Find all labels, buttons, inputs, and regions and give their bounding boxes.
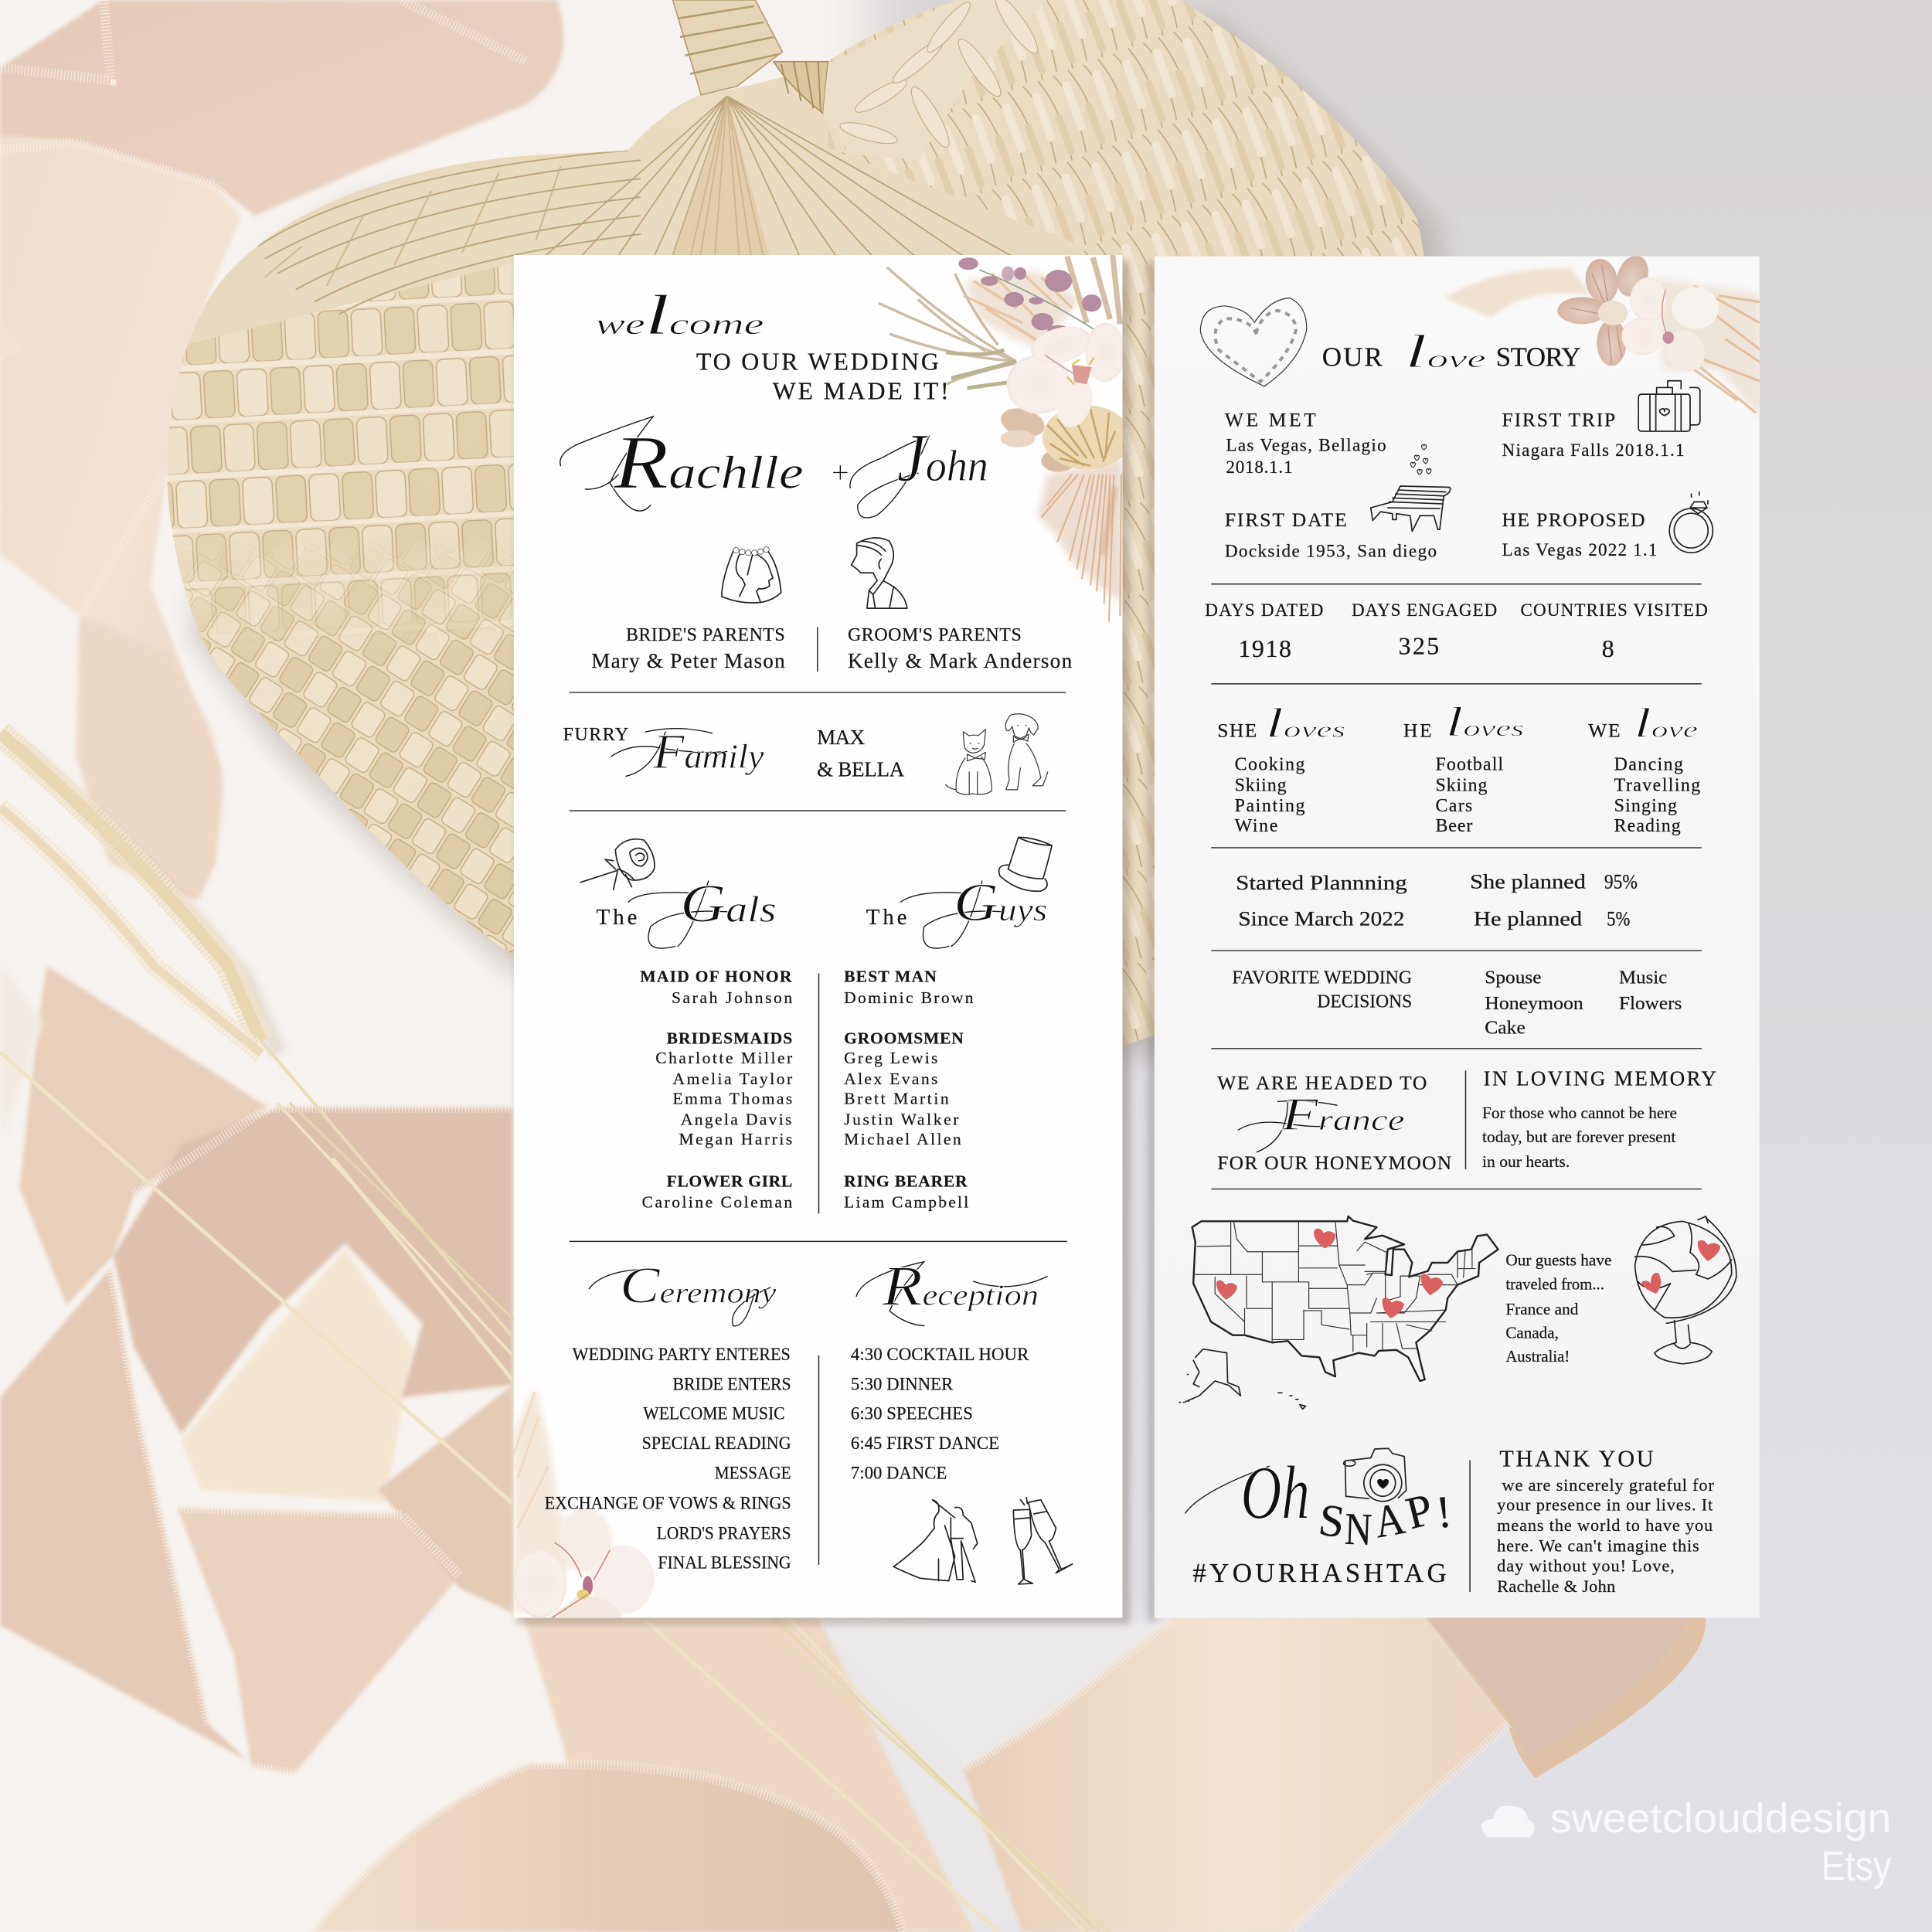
block: favorite wedding decisions: Cake — [1485, 1018, 1526, 1039]
heading: oh snap: S — [1316, 1494, 1348, 1547]
block: parents: GROOM'S PARENTS — [848, 625, 1022, 645]
heading: the gals: The — [597, 905, 637, 930]
block: we love: Singing — [1614, 796, 1677, 816]
block: we love: Travelling — [1614, 776, 1700, 796]
list: ceremony order: MESSAGE — [715, 1462, 791, 1482]
icon: groom — [852, 538, 907, 608]
block: thank you: means the world to have you — [1497, 1515, 1713, 1535]
heading: the guys — [866, 872, 1047, 948]
text: guests travelled: France and — [1505, 1300, 1579, 1318]
block: he proposed: Las Vegas 2022 1.1 — [1502, 539, 1657, 560]
block: planning: 95% — [1604, 871, 1638, 893]
list: groom party: Brett Martin — [844, 1090, 949, 1108]
block: planning: Started Plannning — [1236, 872, 1407, 894]
heading: welcome: TO OUR WEDDING — [696, 348, 939, 375]
floral: top right corner — [879, 255, 1131, 622]
icon: globe — [1635, 1216, 1736, 1364]
icon: champagne flutes — [1013, 1498, 1073, 1584]
block: we love: Reading — [1614, 816, 1681, 836]
list: bridal party: Angela Davis — [681, 1111, 791, 1129]
list: ceremony order: BRIDE ENTERS — [673, 1373, 791, 1393]
block: favorite wedding decisions — [1232, 967, 1682, 1039]
block: he loves: HE — [1403, 719, 1432, 741]
block: we love — [1588, 699, 1700, 836]
heading: the gals: G als — [680, 874, 776, 934]
block: we met: 2018.1.1 — [1226, 457, 1293, 477]
text: hashtag: #YOURHASHTAG — [1192, 1558, 1447, 1588]
block: planning: She planned — [1470, 871, 1586, 893]
stats: counts: DAYS DATED — [1205, 600, 1323, 620]
list: reception schedule: 4:30 COCKTAIL HOUR — [851, 1344, 1029, 1364]
block: he proposed: HE PROPOSED — [1502, 509, 1645, 531]
list: groom party: Liam Campbell — [844, 1192, 968, 1211]
icon: suitcase — [1638, 381, 1700, 431]
block: thank you: your presence in our lives. It — [1497, 1495, 1713, 1515]
block: he loves: Beer — [1435, 816, 1472, 836]
list: bridal party: FLOWER GIRL — [667, 1172, 792, 1190]
block: thank you: THANK YOU — [1499, 1445, 1654, 1471]
icon: ring — [1669, 492, 1713, 553]
floral: bottom left corner — [512, 1386, 655, 1617]
block: in loving memory — [1482, 1067, 1716, 1171]
text: guests travelled: Our guests have — [1505, 1250, 1611, 1269]
block: favorite wedding decisions: FAVORITE WEDDING — [1232, 967, 1412, 988]
block: parents: Kelly & Mark Anderson — [848, 649, 1073, 672]
watermark: Etsy — [1821, 1843, 1891, 1889]
list: reception schedule: 6:45 FIRST DANCE — [851, 1433, 999, 1453]
block: favorite wedding decisions: Music — [1619, 967, 1667, 988]
block: she loves: Painting — [1235, 796, 1305, 816]
chart: USA map with hearts — [1179, 1216, 1498, 1409]
heading: reception: R eception — [881, 1254, 1039, 1317]
icon: leaf heart — [1200, 298, 1307, 386]
list: groom party: Dominic Brown — [844, 988, 974, 1007]
block: thank you — [1497, 1445, 1714, 1596]
icon: small hearts — [1410, 444, 1431, 474]
heading: oh snap: ! — [1434, 1485, 1454, 1538]
icon: bride — [722, 547, 781, 603]
block: planning: He planned — [1474, 907, 1582, 930]
heading: couple names: R achlle — [613, 420, 804, 505]
list: bridal party: Megan Harris — [679, 1130, 792, 1148]
ribbon: upper left satin — [0, 0, 563, 900]
list: groom party: Greg Lewis — [844, 1049, 937, 1067]
heading: oh snap — [1185, 1451, 1454, 1555]
list: bridal party: Emma Thomas — [673, 1090, 792, 1108]
heading: our love story: l ove — [1405, 326, 1486, 378]
block: honeymoon — [1217, 1071, 1451, 1174]
block: furry family: FURRY — [563, 725, 628, 745]
ribbons: below the cards and spool — [311, 1617, 1706, 1932]
heading: ceremony — [589, 1257, 776, 1326]
block: he loves — [1403, 699, 1524, 836]
floral: top right corner — [1444, 251, 1762, 419]
block: he proposed — [1502, 509, 1657, 560]
list: bridal party: Amelia Taylor — [673, 1070, 792, 1088]
block: favorite wedding decisions: Spouse — [1485, 967, 1542, 988]
block: planning: Since March 2022 — [1238, 907, 1405, 930]
heading: oh snap: P — [1401, 1483, 1438, 1539]
heading: the guys: The — [866, 905, 906, 930]
watermark — [1481, 1795, 1891, 1889]
block: furry family — [563, 723, 905, 781]
block: thank you: we are sincerely grateful for — [1502, 1475, 1714, 1495]
heading: couple names: + — [829, 454, 851, 490]
text: guests travelled: Canada, — [1505, 1324, 1559, 1342]
heading: our love story: OUR — [1322, 342, 1383, 372]
block: planning: 5% — [1607, 907, 1630, 930]
block: we love: WE — [1588, 719, 1621, 741]
icon: dancing couple — [893, 1500, 978, 1582]
block: she loves: Skiing — [1235, 776, 1287, 796]
block: we love: Dancing — [1614, 754, 1683, 774]
heading: our love story: STORY — [1496, 342, 1581, 372]
fan shadow — [191, 19, 1460, 1060]
block: he loves: Cars — [1435, 796, 1472, 816]
block: he loves: Skiing — [1435, 776, 1487, 796]
list: ceremony order: LORD'S PRAYERS — [657, 1522, 791, 1543]
text: guests travelled: traveled from... — [1505, 1275, 1604, 1294]
list: ceremony order: WEDDING PARTY ENTERES — [573, 1344, 791, 1364]
icon: cat and dog — [945, 714, 1048, 794]
block: in loving memory: today, but are forever present — [1482, 1128, 1675, 1146]
heading: welcome — [595, 284, 949, 405]
block: favorite wedding decisions: Flowers — [1619, 993, 1682, 1014]
list: groom party: BEST MAN — [844, 968, 937, 986]
heading: reception — [856, 1254, 1047, 1326]
watermark: sweetclouddesign — [1550, 1795, 1891, 1842]
block: she loves — [1217, 699, 1345, 836]
woven palm fan — [167, 0, 1424, 1046]
block: honeymoon: FOR OUR HONEYMOON — [1217, 1151, 1451, 1174]
list: bridal party: BRIDESMAIDS — [667, 1029, 792, 1047]
block: first date: FIRST DATE — [1225, 509, 1347, 531]
heading: oh snap: N — [1344, 1503, 1372, 1555]
block: in loving memory: For those who cannot be here — [1482, 1104, 1677, 1122]
block: she loves: l oves — [1265, 699, 1345, 746]
icon: top hat — [999, 837, 1052, 891]
block: parents: Mary & Peter Mason — [591, 649, 785, 672]
heading: welcome: we l come — [595, 284, 764, 346]
block: she loves: Cooking — [1235, 754, 1305, 774]
list: groom party: GROOMSMEN — [844, 1029, 964, 1047]
text: guests travelled — [1505, 1250, 1611, 1366]
block: he loves: Football — [1435, 754, 1503, 774]
block: we met: Las Vegas, Bellagio — [1226, 435, 1386, 455]
card shadows — [516, 261, 1156, 1624]
block: planning — [1236, 871, 1638, 930]
list: ceremony order: WELCOME MUSIC — [643, 1403, 785, 1423]
text: guests travelled: Australia! — [1505, 1347, 1570, 1366]
icon: camera — [1344, 1448, 1406, 1502]
dried grass stems and plumes — [0, 733, 1109, 1932]
block: first trip — [1502, 409, 1685, 460]
list: ceremony order: EXCHANGE OF VOWS & RINGS — [545, 1492, 791, 1512]
block: first date — [1225, 509, 1437, 561]
block: favorite wedding decisions: DECISIONS — [1317, 991, 1412, 1012]
heading: our love story — [1322, 326, 1581, 378]
block: honeymoon: WE ARE HEADED TO — [1217, 1071, 1427, 1094]
list: reception schedule: 6:30 SPEECHES — [851, 1403, 973, 1423]
list: bridal party: Caroline Coleman — [642, 1192, 792, 1211]
stats: counts: 1918 — [1238, 635, 1291, 662]
ribbons: lower left folds — [0, 961, 512, 1773]
block: we love: l ove — [1634, 699, 1698, 746]
heading: couple names: John — [897, 420, 988, 496]
panel: left card, wedding program — [512, 255, 1131, 1617]
stats: counts: 325 — [1399, 633, 1439, 660]
list: groom party — [844, 968, 974, 1212]
block: she loves: SHE — [1217, 719, 1257, 741]
heading: the gals — [597, 874, 776, 948]
block: he loves: l oves — [1445, 699, 1524, 745]
block: parents: BRIDE'S PARENTS — [626, 625, 785, 645]
list: bridal party: Sarah Johnson — [672, 988, 792, 1007]
block: we met: WE MET — [1225, 409, 1316, 431]
list: bridal party — [640, 968, 792, 1212]
block: honeymoon: F rance — [1281, 1089, 1405, 1141]
list: reception schedule: 5:30 DINNER — [851, 1373, 954, 1393]
block: thank you: here. We can't imagine this — [1497, 1536, 1699, 1555]
heading: ceremony: C eremony — [620, 1257, 776, 1314]
block: furry family: & BELLA — [817, 757, 905, 781]
heading: oh snap: A — [1370, 1492, 1409, 1548]
list: groom party: Michael Allen — [844, 1130, 961, 1148]
block: thank you: Rachelle & John — [1497, 1577, 1615, 1596]
list: bridal party: Charlotte Miller — [655, 1049, 792, 1067]
stats: counts: 8 — [1602, 635, 1614, 662]
list: reception schedule: 7:00 DANCE — [851, 1462, 947, 1482]
heading: welcome: WE MADE IT! — [773, 378, 949, 405]
block: thank you: day without you! Love, — [1497, 1556, 1675, 1576]
list: groom party: Justin Walker — [844, 1111, 958, 1129]
heading: oh snap: Oh — [1241, 1451, 1310, 1535]
list: groom party: Alex Evans — [844, 1070, 937, 1088]
block: we met — [1225, 409, 1386, 477]
stats: counts: DAYS ENGAGED — [1352, 600, 1497, 620]
list: ceremony order — [545, 1344, 791, 1573]
block: first trip: FIRST TRIP — [1502, 409, 1615, 431]
block: in loving memory: IN LOVING MEMORY — [1484, 1067, 1716, 1090]
icon: bench — [1371, 486, 1451, 532]
block: furry family: MAX — [817, 726, 866, 749]
list: ceremony order: FINAL BLESSING — [658, 1553, 791, 1573]
stats: counts — [1205, 600, 1708, 662]
list: ceremony order: SPECIAL READING — [642, 1433, 791, 1453]
list: bridal party: MAID OF HONOR — [640, 968, 792, 986]
map hearts — [1216, 1229, 1443, 1318]
block: favorite wedding decisions: Honeymoon — [1485, 993, 1583, 1014]
block: furry family: Family — [652, 723, 764, 778]
block: she loves: Wine — [1235, 816, 1277, 836]
heading: couple names — [560, 417, 988, 518]
list: groom party: RING BEARER — [844, 1172, 968, 1190]
list: reception schedule — [851, 1344, 1029, 1482]
stats: counts: COUNTRIES VISITED — [1520, 600, 1708, 620]
block: parents — [591, 625, 1073, 672]
block: first date: Dockside 1953, San diego — [1225, 541, 1437, 561]
block: first trip: Niagara Falls 2018.1.1 — [1502, 440, 1685, 460]
panel: right card, our love story — [1155, 251, 1762, 1617]
icon: rose — [580, 839, 655, 889]
heading: the guys: G uys — [954, 872, 1047, 933]
block: in loving memory: in our hearts. — [1482, 1152, 1570, 1171]
